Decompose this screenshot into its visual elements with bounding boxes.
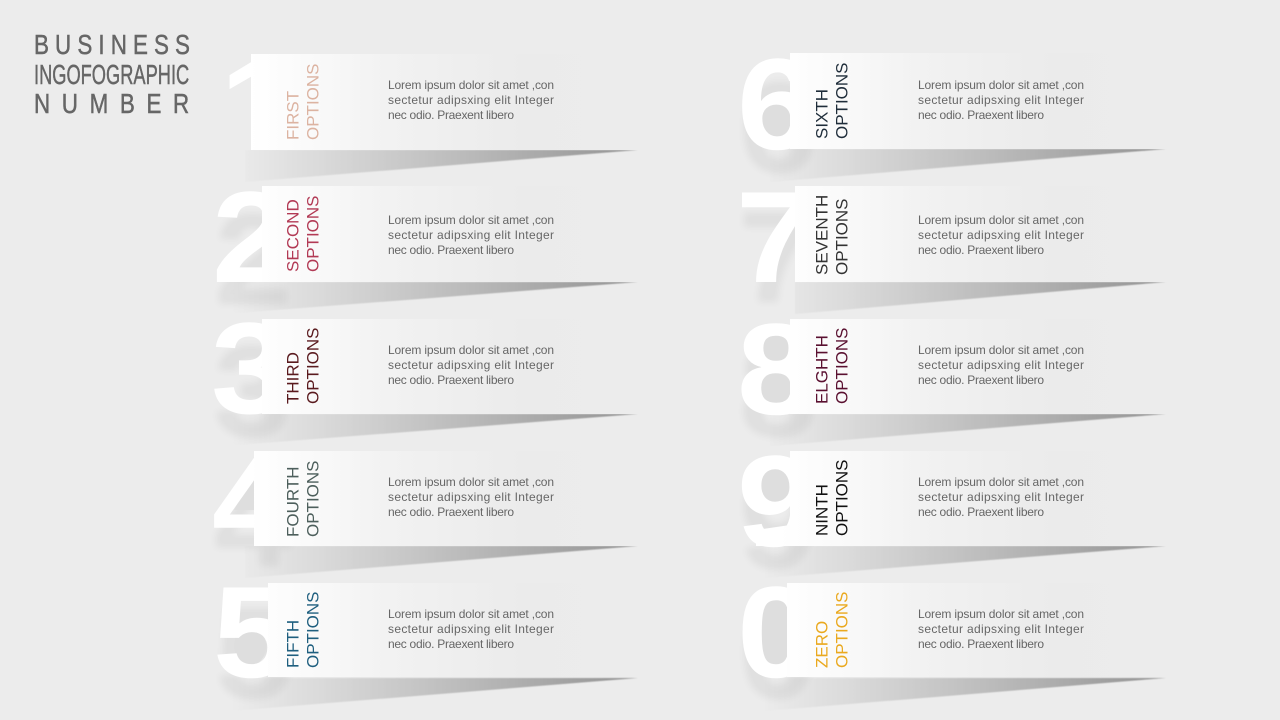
panel: ninth options: 9 (739, 450, 817, 596)
label: third options: THIRD (284, 352, 302, 404)
panel: sixth options: 6 (739, 54, 817, 200)
text: sixth description (918, 78, 1084, 122)
text: ninth description: nec odio. Praexent libero (918, 505, 1044, 519)
label: fourth options: FOURTH (284, 466, 302, 537)
label: ninth options (812, 459, 852, 536)
text: second description: Lorem ipsum dolor sit amet ,con (388, 213, 554, 227)
text: eighth description: Lorem ipsum dolor sit amet ,con (918, 343, 1084, 357)
text: first description (388, 78, 554, 122)
text: seventh description (918, 213, 1084, 257)
label: fifth options: OPTIONS (304, 591, 322, 668)
text: ninth description: Lorem ipsum dolor sit amet ,con (918, 475, 1084, 489)
label: fifth options (284, 591, 322, 668)
panel: first options (230, 54, 636, 178)
label: fifth options: FIFTH (284, 620, 302, 668)
number 0: 0 (737, 559, 815, 705)
panel: sixth options (737, 31, 1170, 200)
number 8: 8 (737, 296, 815, 442)
text: second description (388, 213, 554, 257)
panel: eighth options: 8 (739, 318, 817, 464)
text: fifth description (388, 607, 554, 651)
label: seventh options: OPTIONS (832, 198, 852, 275)
panel: fourth options (212, 428, 640, 594)
text: first description: sectetur adipsxing elit Integer (388, 93, 554, 107)
panel: fifth options (213, 559, 640, 720)
label: second options: SECOND (284, 199, 302, 272)
text: second description: nec odio. Praexent libero (388, 243, 514, 257)
label: zero options (812, 591, 852, 668)
label: first options: OPTIONS (304, 63, 322, 140)
label: fourth options: OPTIONS (304, 460, 322, 537)
panel: second options (212, 164, 640, 332)
label: sixth options: SIXTH (812, 89, 832, 139)
text: third description: sectetur adipsxing elit Integer (388, 358, 554, 372)
text: fifth description: Lorem ipsum dolor sit amet ,con (388, 607, 554, 621)
label: seventh options: SEVENTH (812, 195, 832, 275)
panel: eighth options (737, 296, 1170, 464)
panel: seventh options (736, 164, 1170, 330)
panel: second options: 2 (214, 186, 292, 332)
text: sixth description: sectetur adipsxing elit Integer (918, 93, 1084, 107)
text: fifth description: nec odio. Praexent libero (388, 637, 514, 651)
panel: zero options (737, 559, 1170, 720)
panel: fourth options: 4 (214, 448, 292, 594)
text: fourth description: Lorem ipsum dolor sit amet ,con (388, 475, 554, 489)
text: zero description (918, 607, 1084, 651)
text: fourth description (388, 475, 554, 519)
text: first description: nec odio. Praexent libero (388, 108, 514, 122)
label: third options: OPTIONS (304, 327, 322, 404)
title: INGOFOGRAPHIC (34, 60, 189, 91)
label: zero options: OPTIONS (832, 591, 852, 668)
panel: seventh options: 7 (738, 184, 816, 330)
panel: third options (211, 295, 640, 464)
label: ninth options: NINTH (812, 484, 832, 536)
label: first options: FIRST (284, 91, 302, 140)
title (34, 30, 190, 120)
label: second options (284, 195, 322, 272)
label: fourth options (284, 460, 322, 537)
text: fourth description: sectetur adipsxing elit Integer (388, 490, 554, 504)
number 2: 2 (212, 164, 290, 310)
text: fourth description: nec odio. Praexent libero (388, 505, 514, 519)
text: fifth description: sectetur adipsxing elit Integer (388, 622, 554, 636)
number 5: 5 (213, 559, 291, 705)
panel: ninth options (737, 428, 1170, 596)
number 1: 1 (220, 32, 298, 178)
text: eighth description (918, 343, 1084, 387)
label: sixth options: OPTIONS (832, 62, 852, 139)
label: third options (284, 327, 322, 404)
text: eighth description: nec odio. Praexent libero (918, 373, 1044, 387)
text: ninth description (918, 475, 1084, 519)
label: zero options: ZERO (812, 621, 832, 668)
text: sixth description: nec odio. Praexent libero (918, 108, 1044, 122)
number 6: 6 (737, 31, 815, 177)
label: ninth options: OPTIONS (832, 459, 852, 536)
text: ninth description: sectetur adipsxing elit Integer (918, 490, 1084, 504)
label: first options (284, 63, 322, 140)
text: first description: Lorem ipsum dolor sit amet ,con (388, 78, 554, 92)
number 4: 4 (212, 428, 290, 574)
label: eighth options: OPTIONS (832, 327, 852, 404)
title: BUSINESS (34, 30, 190, 61)
text: eighth description: sectetur adipsxing elit Integer (918, 358, 1084, 372)
text: zero description: Lorem ipsum dolor sit amet ,con (918, 607, 1084, 621)
text: seventh description: nec odio. Praexent libero (918, 243, 1044, 257)
text: zero description: nec odio. Praexent libero (918, 637, 1044, 651)
text: third description (388, 343, 554, 387)
label: eighth options (812, 327, 852, 404)
text: seventh description: Lorem ipsum dolor sit amet ,con (918, 213, 1084, 227)
number 3: 3 (211, 295, 289, 441)
number 9: 9 (737, 428, 815, 574)
title: NUMBER (34, 89, 189, 120)
text: seventh description: sectetur adipsxing elit Integer (918, 228, 1084, 242)
label: sixth options (812, 62, 852, 139)
text: zero description: sectetur adipsxing elit Integer (918, 622, 1084, 636)
text: third description: nec odio. Praexent libero (388, 373, 514, 387)
label: eighth options: ELGHTH (812, 335, 832, 404)
number 7: 7 (736, 164, 814, 310)
text: third description: Lorem ipsum dolor sit amet ,con (388, 343, 554, 357)
panel: third options: 3 (213, 318, 291, 464)
text: sixth description: Lorem ipsum dolor sit amet ,con (918, 78, 1084, 92)
label: second options: OPTIONS (304, 195, 322, 272)
label: seventh options (812, 195, 852, 275)
text: second description: sectetur adipsxing elit Integer (388, 228, 554, 242)
